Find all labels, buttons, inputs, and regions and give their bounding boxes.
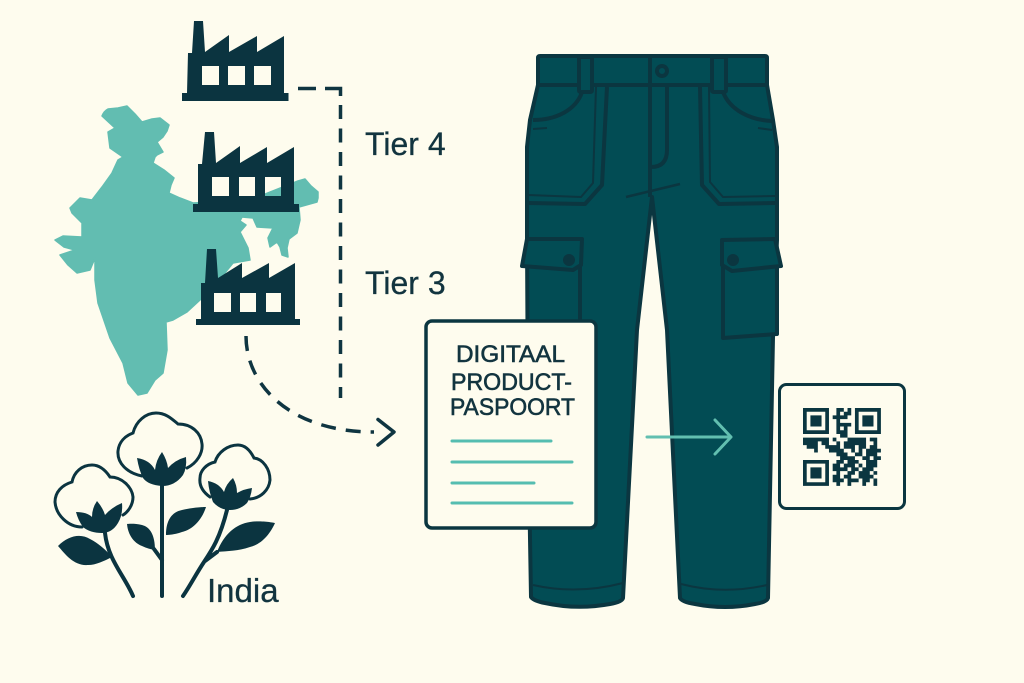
hems xyxy=(533,583,767,590)
waistband button xyxy=(657,66,667,76)
trousers xyxy=(522,56,781,607)
card heading: PASPOORT xyxy=(450,394,575,421)
cotton plant right xyxy=(183,445,275,596)
card text lines xyxy=(452,441,572,503)
belt loops xyxy=(579,57,726,92)
icon: cotton plants xyxy=(55,413,275,596)
card heading: DIGITAAL xyxy=(456,341,565,368)
cotton plant left xyxy=(55,465,133,596)
dashed connector: tier line xyxy=(298,88,340,398)
label: Tier 4: Tier 4 xyxy=(365,126,446,162)
hip panel seams xyxy=(528,87,775,204)
arrow: passport to QR xyxy=(647,420,731,454)
icon: factory tier 4 xyxy=(182,21,288,101)
label: India: India xyxy=(207,572,279,609)
card: digital product passport xyxy=(426,321,596,528)
waistband xyxy=(538,56,767,85)
dashed arrow to passport xyxy=(246,336,394,445)
icon: factory India xyxy=(196,249,300,325)
card heading xyxy=(450,341,575,421)
label: Tier 3: Tier 3 xyxy=(365,265,446,301)
QR card xyxy=(780,384,904,508)
left cargo pocket xyxy=(578,267,582,325)
card heading: PRODUCT- xyxy=(451,369,572,396)
trousers body xyxy=(527,85,777,607)
right cargo pocket xyxy=(723,267,777,338)
front pockets xyxy=(533,92,772,121)
crotch crease xyxy=(626,184,680,197)
QR code xyxy=(803,408,881,486)
fly and centre seam xyxy=(650,85,667,197)
icon: factory tier 3 xyxy=(193,132,299,212)
cotton plant centre xyxy=(118,413,206,596)
map: India xyxy=(55,106,318,395)
